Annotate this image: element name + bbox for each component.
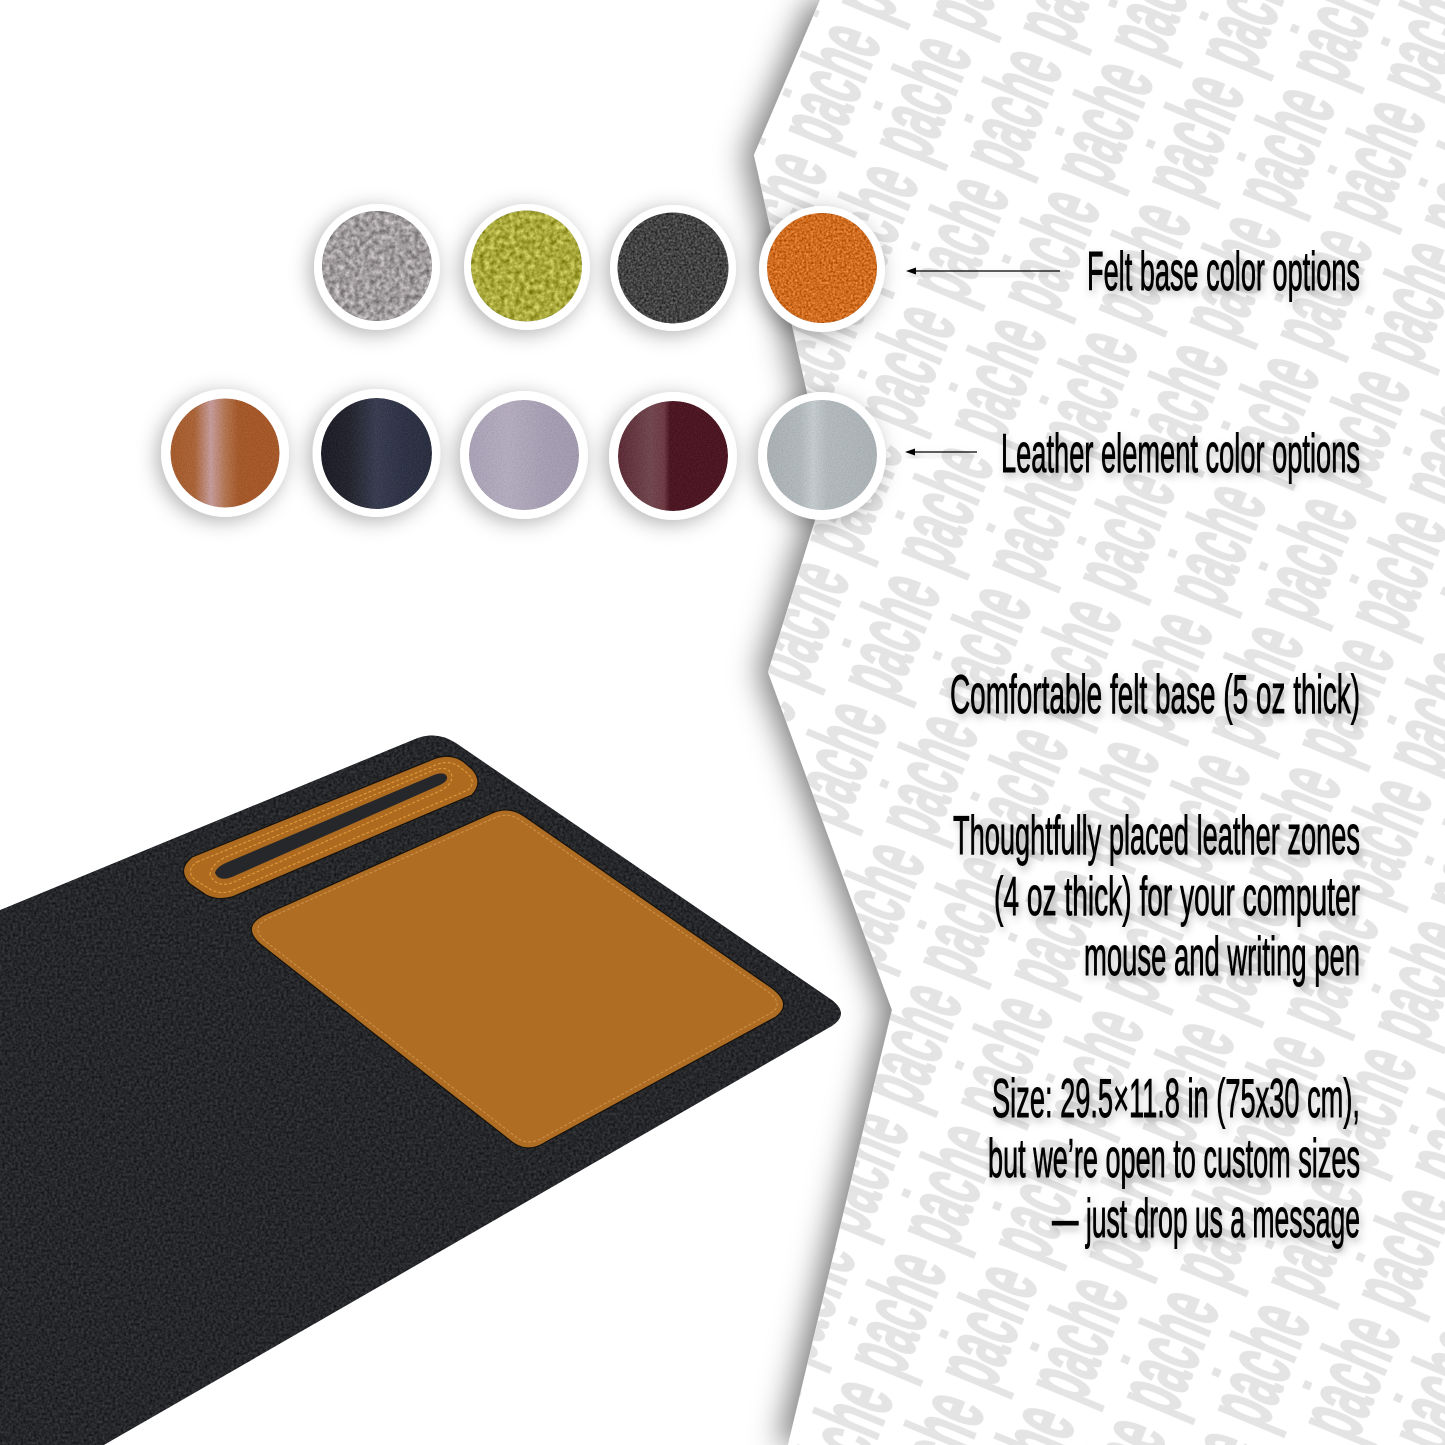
leather pen holder bbox=[183, 756, 478, 899]
panel: patterned right background bbox=[754, 0, 1445, 1445]
swatches: felt base colors bbox=[314, 204, 885, 332]
swatches: leather element colors bbox=[161, 389, 886, 520]
leather mouse pad bbox=[251, 810, 784, 1148]
arrow: felt base bbox=[906, 268, 1060, 274]
text: leather zones bbox=[953, 804, 1360, 987]
product photo: felt desk mat bbox=[0, 735, 841, 1445]
arrow: leather element bbox=[905, 448, 977, 456]
text: size information bbox=[988, 1067, 1360, 1249]
